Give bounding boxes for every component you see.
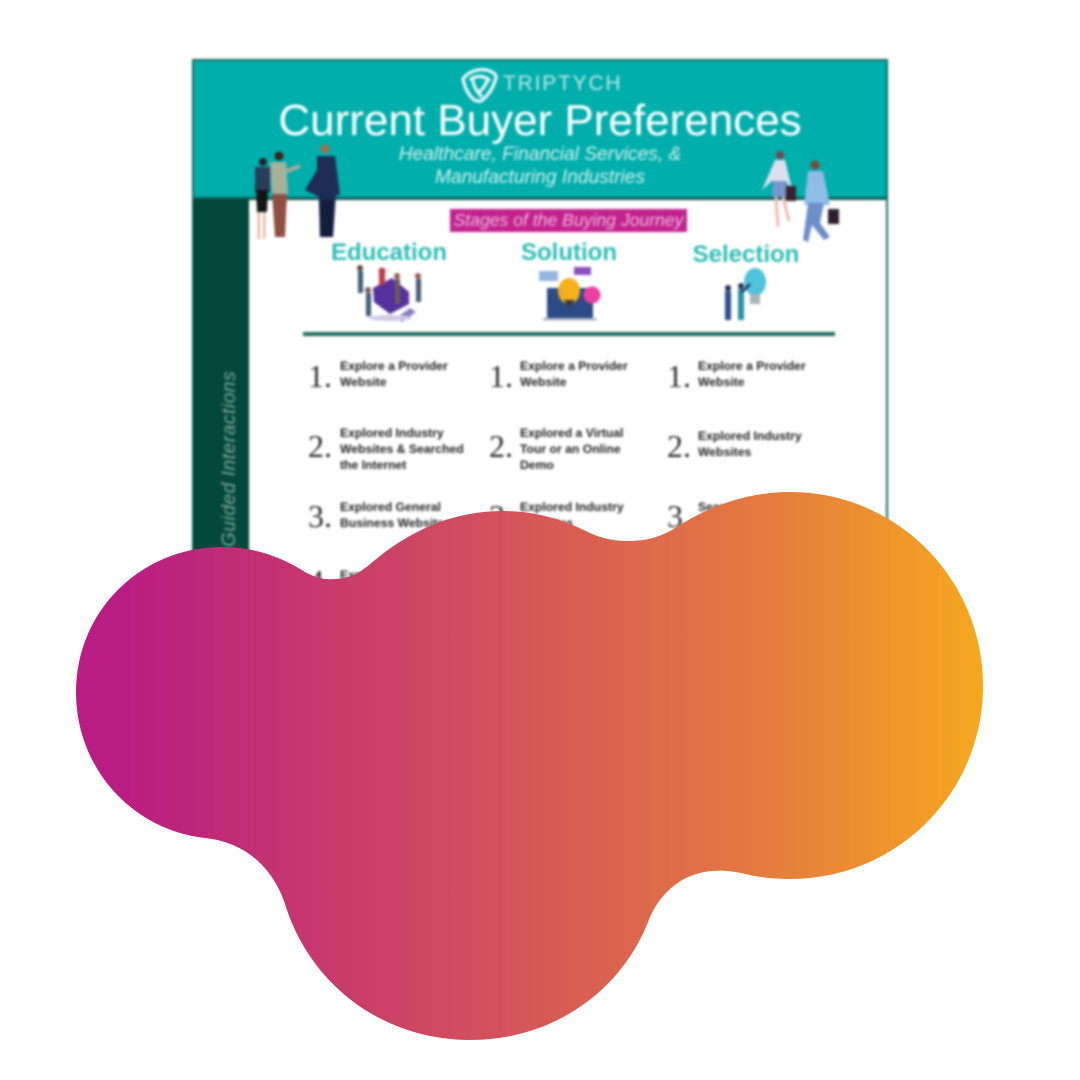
- column 1 list: Explored: [340, 568, 392, 582]
- column 1 list: the Internet: [340, 458, 406, 472]
- column 3 list: Explore a Provider: [698, 359, 806, 373]
- column 2 list: Explored Industry: [520, 500, 624, 514]
- sidebar label: Guided Interactions: [219, 371, 240, 547]
- column 2 list: Websites: [520, 516, 573, 530]
- item 3: 3.: [489, 498, 513, 534]
- column 2 list: Explored a Virtual: [520, 426, 623, 440]
- column 3 list: Websites: [698, 445, 751, 459]
- subtitle: [398, 144, 682, 189]
- column 1 list: Business Websites: [340, 516, 451, 530]
- item 2: 2.: [489, 428, 513, 464]
- item 3: 3.: [308, 498, 332, 534]
- column 3 list: [666, 358, 807, 534]
- item 1: 1.: [667, 358, 691, 394]
- column 2 list: Explore a Provider: [520, 359, 628, 373]
- document page: [192, 59, 888, 701]
- icon: solution laptop and bulb: [537, 265, 602, 322]
- logo mark: [460, 66, 500, 105]
- icon: selection people and bulb: [723, 266, 768, 322]
- column 2 list: Demo: [520, 458, 554, 472]
- column 3 list: Explored Industry: [698, 429, 802, 443]
- people: right pair: [761, 150, 841, 244]
- column 1 list: Websites & Searched: [340, 442, 464, 456]
- column 1 list: Explored General: [340, 500, 441, 514]
- logo text: TRIPTYCH: [503, 72, 622, 95]
- column 1 list: Explore a Provider: [340, 359, 448, 373]
- header rule: [194, 197, 886, 200]
- stages banner: Stages of the Buying Journey: [454, 210, 683, 230]
- column 2 list: Website: [520, 375, 567, 389]
- header band: [194, 61, 886, 197]
- column 2 list: Tour or an Online: [520, 442, 621, 456]
- heading: Selection: Selection: [693, 241, 799, 268]
- subtitle: Healthcare, Financial Services, &: [399, 144, 681, 165]
- column 3 list: Internet: [698, 516, 743, 530]
- heading: Education: Education: [331, 239, 447, 266]
- column 1 list: [308, 358, 465, 599]
- sidebar: [193, 199, 249, 699]
- icon: education group and books: [355, 263, 423, 324]
- title: Current Buyer Preferences: [278, 96, 802, 145]
- item 1: 1.: [489, 358, 513, 394]
- heading: Solution: Solution: [521, 239, 617, 266]
- column 1 list: Explored Industry: [340, 426, 444, 440]
- item 3: 3.: [667, 498, 691, 534]
- column 3 list: Website: [698, 375, 745, 389]
- item 1: 1.: [308, 358, 332, 394]
- divider rule: [303, 332, 835, 336]
- item 2: 2.: [667, 428, 691, 464]
- item 4: 4.: [308, 563, 332, 599]
- subtitle: Manufacturing Industries: [435, 167, 645, 188]
- item 2: 2.: [308, 428, 332, 464]
- column 3 list: Searched: [698, 500, 753, 514]
- people: left group: [253, 142, 342, 240]
- column 2 list: [488, 358, 629, 534]
- column 1 list: Website: [340, 375, 387, 389]
